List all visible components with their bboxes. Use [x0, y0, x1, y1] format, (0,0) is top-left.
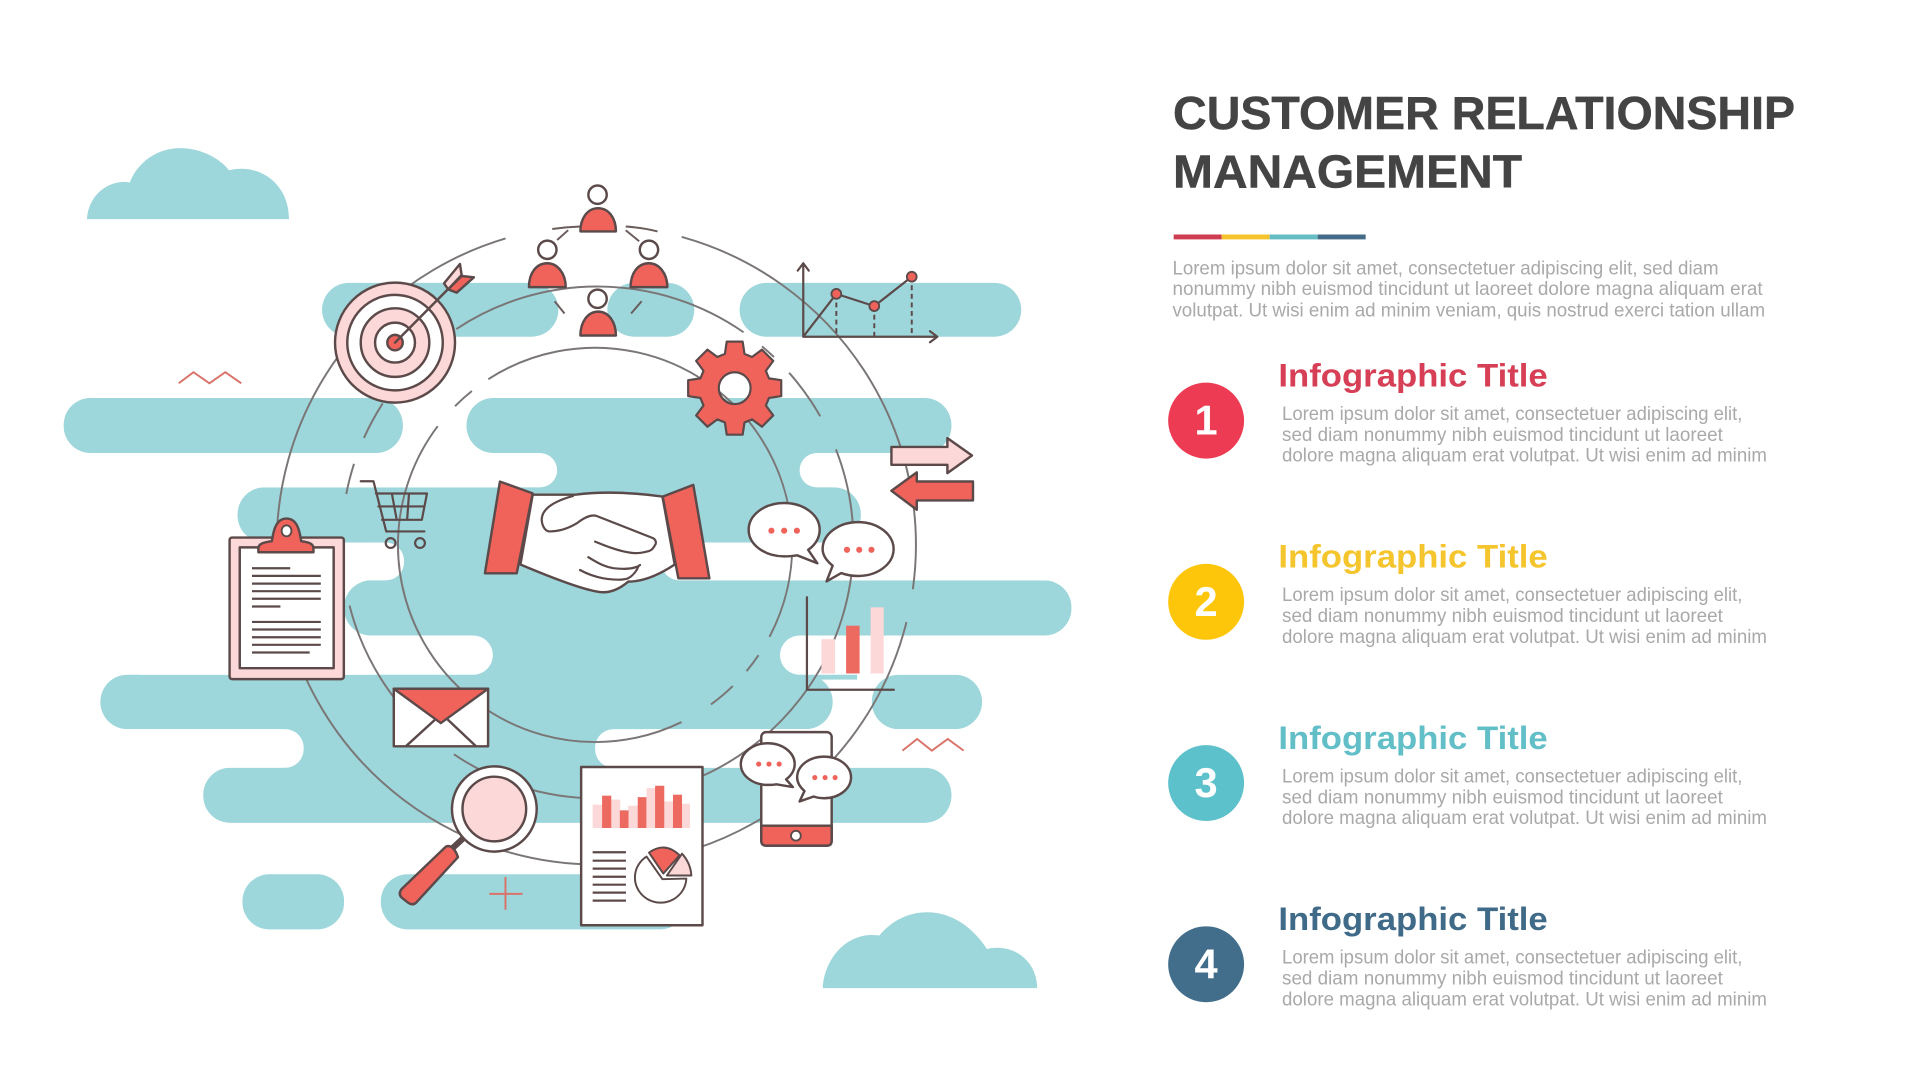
decoration: zigzag top left: [179, 372, 241, 383]
icon: line chart: [798, 263, 937, 342]
item 2: [1168, 539, 1767, 648]
icon: smartphone with chat: [741, 732, 851, 846]
background: teal cloud bars: [61, 148, 1273, 988]
item 4: dolore magna aliquam erat volutpat. Ut wisi enim ad minim: [1282, 989, 1767, 1010]
icon: target with arrow: [335, 264, 474, 403]
item 4: [1168, 901, 1767, 1010]
title: [1173, 87, 1795, 197]
title: CUSTOMER RELATIONSHIP: [1173, 87, 1795, 139]
decoration: plus: [489, 877, 522, 910]
item 4: Lorem ipsum dolor sit amet, consectetuer adipiscing elit,: [1282, 948, 1742, 969]
intro text: nonummy nibh euismod tincidunt ut laoreet dolore magna aliquam erat: [1172, 279, 1763, 300]
intro text: Lorem ipsum dolor sit amet, consectetuer adipiscing elit, sed diam: [1172, 258, 1719, 279]
icon: gear: [688, 342, 781, 435]
concentric dashed rings: [203, 151, 990, 939]
item 2: sed diam nonummy nibh euismod tincidunt ut laoreet: [1282, 606, 1724, 627]
item 3: Lorem ipsum dolor sit amet, consectetuer adipiscing elit,: [1282, 766, 1742, 787]
item 4: Infographic Title: [1278, 901, 1548, 937]
icon: bar chart: [807, 597, 894, 690]
item 4: sed diam nonummy nibh euismod tincidunt ut laoreet: [1282, 968, 1724, 989]
item 2: Infographic Title: [1278, 539, 1548, 575]
item 1: sed diam nonummy nibh euismod tincidunt ut laoreet: [1282, 425, 1724, 446]
item 3: sed diam nonummy nibh euismod tincidunt ut laoreet: [1282, 787, 1724, 808]
intro text: volutpat. Ut wisi enim ad minim veniam, quis nostrud exerci tation ullam: [1172, 301, 1765, 322]
icon: report document: [581, 767, 702, 925]
icon: exchange arrows: [891, 438, 973, 510]
item 3: Infographic Title: [1278, 720, 1548, 756]
item 2: Lorem ipsum dolor sit amet, consectetuer adipiscing elit,: [1282, 585, 1742, 606]
icon: handshake: [485, 482, 709, 592]
icon: speech bubbles: [749, 503, 894, 581]
item 1: Lorem ipsum dolor sit amet, consectetuer adipiscing elit,: [1282, 404, 1742, 425]
item 2: dolore magna aliquam erat volutpat. Ut wisi enim ad minim: [1282, 627, 1767, 648]
title: MANAGEMENT: [1173, 145, 1522, 197]
item 3: [1168, 720, 1767, 829]
icon: magnifier: [400, 766, 537, 904]
item 3: 3: [1195, 759, 1218, 806]
item 2: 2: [1195, 578, 1218, 625]
intro text: [1172, 258, 1765, 322]
icon: envelope: [394, 689, 488, 746]
item 4: 4: [1195, 940, 1218, 987]
icon: shopping cart: [361, 481, 427, 548]
icon: people network: [529, 186, 667, 336]
item 3: dolore magna aliquam erat volutpat. Ut wisi enim ad minim: [1282, 808, 1767, 829]
decoration: zigzag bottom right: [902, 739, 964, 751]
item 1: Infographic Title: [1278, 357, 1548, 393]
item 1: [1168, 357, 1767, 467]
icon: clipboard: [230, 519, 344, 679]
item 1: 1: [1195, 397, 1218, 444]
divider: colour strip: [1174, 234, 1366, 239]
item 1: dolore magna aliquam erat volutpat. Ut wisi enim ad minim: [1282, 446, 1767, 467]
